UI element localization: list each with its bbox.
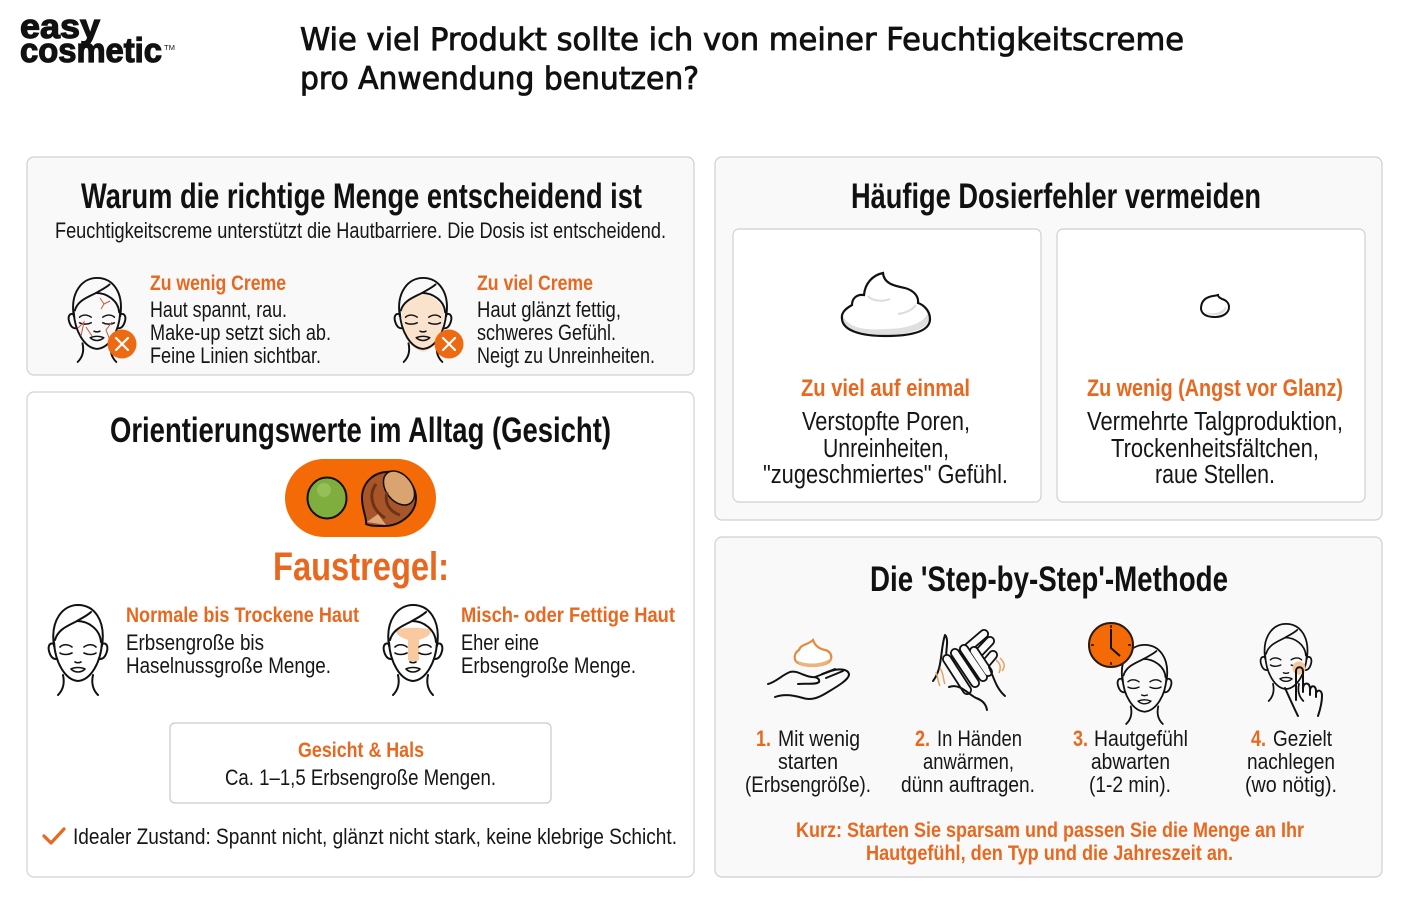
text: Zu viel auf einmal: Unreinheiten,: [823, 435, 949, 463]
text: Normale bis Trockene Haut: [126, 603, 359, 678]
text: Zu viel auf einmal: [763, 375, 1008, 489]
panel: Orientierungswerte im Alltag: [27, 392, 694, 877]
panel: Step-by-Step: [715, 537, 1382, 877]
step 1: starten: [778, 749, 838, 774]
text: Normale bis Trockene Haut: Normale bis Trockene Haut: [126, 603, 359, 627]
icon: oily face: [395, 278, 464, 362]
panel: Häufige Dosierfehler: [715, 157, 1382, 520]
card: Zu viel auf einmal: [733, 229, 1041, 502]
step 2: In Händen: [937, 726, 1022, 751]
text: Zu wenig Creme: [150, 271, 331, 368]
icon: clock and face: [1089, 623, 1171, 724]
step 1: [745, 640, 871, 797]
text: Zu wenig Creme: Haut spannt, rau.: [150, 297, 287, 322]
text: Zu wenig: Vermehrte Talgproduktion,: [1087, 408, 1343, 436]
step 3: [1073, 623, 1188, 797]
summary callout: [796, 818, 1305, 865]
text: Zu viel auf einmal: Verstopfte Poren,: [802, 408, 970, 436]
step 2: anwärmen,: [923, 749, 1014, 774]
card: Zu wenig: [1057, 229, 1365, 502]
step 2: dünn auftragen.: [901, 772, 1035, 797]
icon: warming hands: [933, 634, 1005, 710]
summary callout: Kurz: Starten Sie sparsam und passen Sie die Menge an Ihr: [796, 818, 1305, 842]
icon: face with fingertip: [1261, 624, 1322, 716]
text: Zu wenig: Zu wenig (Angst vor Glanz): [1087, 375, 1343, 402]
step 3: Hautgefühl: [1094, 726, 1188, 751]
title: Wie viel Produkt sollte ich von meiner Feuchtigkeitscreme: [300, 22, 1184, 58]
text: Normale bis Trockene Haut: Haselnussgroße Menge.: [126, 653, 331, 678]
text: Zu wenig Creme: Zu wenig Creme: [150, 271, 286, 295]
logo: easy cosmetic: cosmetic: [20, 32, 162, 70]
icon: pea and hazelnut pill: [285, 459, 436, 537]
text: Normale bis Trockene Haut: Erbsengroße bis: [126, 630, 264, 655]
step 4: Gezielt: [1273, 726, 1333, 751]
text: Zu viel Creme: Zu viel Creme: [477, 271, 593, 295]
text: Zu wenig: raue Stellen.: [1155, 461, 1275, 489]
step 4: [1245, 624, 1337, 797]
box: Gesicht und Hals: [170, 723, 551, 803]
intro text: Feuchtigkeitscreme unterstützt die Hautbarriere. Die Dosis ist entscheidend.: [55, 218, 666, 243]
heading: Orientierungswerte: Orientierungswerte im Alltag (Gesicht): [110, 411, 611, 450]
icon: large cream dollop: [842, 273, 930, 336]
step 3: 3.: [1073, 726, 1088, 751]
logo: easy cosmetic: [20, 8, 175, 70]
step 3: (1-2 min).: [1089, 772, 1171, 797]
icon: dry face with wrinkles: [69, 278, 136, 362]
step 1: Mit wenig: [778, 726, 860, 751]
heading: Warum die richtige Menge: Warum die richtige Menge entscheidend ist: [81, 177, 642, 216]
step 1: 1.: [756, 726, 771, 751]
text: Zu viel Creme: [477, 271, 655, 368]
summary callout: Hautgefühl, den Typ und die Jahreszeit an.: [866, 841, 1233, 865]
text: Zu viel Creme: Haut glänzt fettig,: [477, 297, 621, 322]
text: Zu wenig: [1087, 375, 1343, 489]
icon: face normal skin: [49, 605, 107, 695]
text: Zu wenig Creme: Make-up setzt sich ab.: [150, 320, 331, 345]
text: Zu wenig: Trockenheitsfältchen,: [1111, 435, 1319, 463]
step 4: (wo nötig).: [1245, 772, 1337, 797]
text: Zu viel Creme: schweres Gefühl.: [477, 320, 616, 345]
text: Zu viel Creme: Neigt zu Unreinheiten.: [477, 343, 655, 368]
heading: Faustregel: Faustregel:: [273, 545, 449, 589]
box: Gesicht und Hals: Gesicht & Hals: [298, 738, 424, 762]
title: [300, 22, 1184, 97]
logo: easy cosmetic: easy: [20, 8, 100, 46]
text: Misch- oder Fettige Haut: Erbsengroße Menge.: [461, 653, 636, 678]
heading: Step-by-Step: Die 'Step-by-Step'-Methode: [870, 560, 1228, 599]
text: Zu viel auf einmal: "zugeschmiertes" Gefühl.: [763, 461, 1008, 489]
step 4: 4.: [1251, 726, 1266, 751]
step 4: nachlegen: [1247, 749, 1335, 774]
icon: hand with cream: [768, 640, 849, 699]
step 2: [901, 634, 1035, 797]
text: Misch- oder Fettige Haut: Misch- oder Fettige Haut: [461, 603, 675, 627]
text: Misch- oder Fettige Haut: Eher eine: [461, 630, 539, 655]
heading: Häufige Dosierfehler: Häufige Dosierfehler vermeiden: [851, 177, 1261, 216]
step 2: 2.: [915, 726, 930, 751]
title: pro Anwendung benutzen?: [300, 61, 699, 97]
text: Zu wenig Creme: Feine Linien sichtbar.: [150, 343, 321, 368]
logo: easy cosmetic: TM: [164, 45, 175, 52]
panel: Warum die richtige Menge: [27, 157, 694, 375]
step 1: (Erbsengröße).: [745, 772, 871, 797]
box: Gesicht und Hals: Ca. 1–1,5 Erbsengroße Mengen.: [225, 765, 496, 790]
ideal state note: Idealer Zustand: Spannt nicht, glänzt nicht stark, keine klebrige Schicht.: [73, 824, 677, 849]
step 3: abwarten: [1091, 749, 1170, 774]
text: Zu viel auf einmal: Zu viel auf einmal: [801, 375, 970, 402]
icon: face with T-zone: [384, 605, 442, 695]
text: Misch- oder Fettige Haut: [461, 603, 675, 678]
icon: small cream dollop: [1201, 295, 1229, 317]
